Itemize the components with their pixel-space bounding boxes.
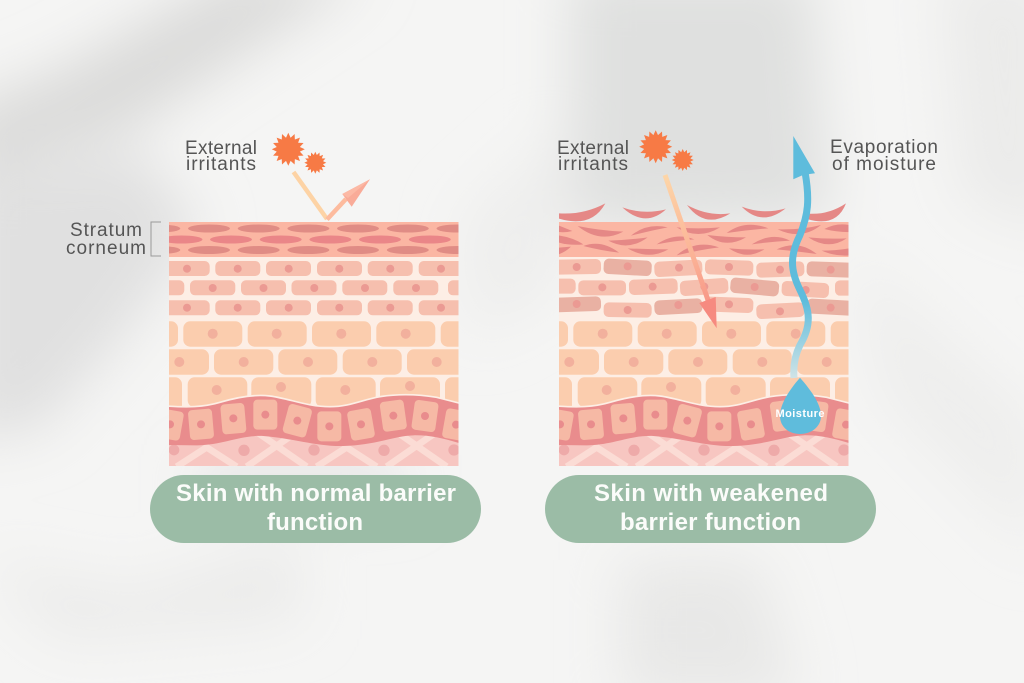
label: external irritants (right) bbox=[557, 138, 629, 175]
caption pill: weakened barrier: barrier function bbox=[620, 509, 801, 536]
stratum corneum layer bbox=[169, 222, 458, 257]
label: external irritants (right): External bbox=[557, 138, 629, 159]
panel: normal skin cross-section bbox=[169, 222, 458, 466]
detached surface flakes bbox=[559, 203, 846, 221]
bracket: stratum corneum extent bbox=[151, 222, 161, 256]
label: stratum corneum bbox=[66, 220, 146, 259]
disordered granular cell rows bbox=[538, 258, 868, 319]
arrow: irritants reflected by healthy barrier bbox=[294, 172, 370, 220]
label: external irritants (right): irritants bbox=[558, 154, 628, 175]
damaged stratum corneum layer bbox=[555, 222, 853, 257]
icon: moisture drop bbox=[776, 378, 824, 434]
label: external irritants (left) bbox=[185, 138, 257, 175]
deeper skin layers: spinous cells, basal layer, dermis bbox=[559, 257, 848, 466]
label: evaporation of moisture: of moisture bbox=[832, 154, 936, 175]
label: external irritants (left): irritants bbox=[186, 154, 256, 175]
label: external irritants (left): External bbox=[185, 138, 257, 159]
granular cell rows bbox=[169, 261, 458, 316]
arrow: irritants penetrating weakened barrier bbox=[665, 175, 717, 328]
caption pill: weakened barrier: Skin with weakened bbox=[594, 480, 828, 507]
caption pill: weakened barrier bbox=[545, 475, 876, 543]
caption pill: normal barrier: Skin with normal barrier bbox=[176, 480, 456, 507]
label: evaporation of moisture: Evaporation bbox=[830, 137, 938, 158]
caption pill: normal barrier bbox=[150, 475, 481, 543]
icon: irritant particles (left) bbox=[272, 133, 326, 174]
caption pill: normal barrier: function bbox=[267, 509, 363, 536]
arrow: moisture evaporating upward bbox=[792, 136, 815, 378]
label: stratum corneum: corneum bbox=[66, 238, 146, 259]
deeper skin layers: spinous cells, basal layer, dermis bbox=[169, 257, 458, 466]
label: evaporation of moisture bbox=[830, 137, 938, 175]
label: stratum corneum: Stratum bbox=[70, 220, 142, 241]
icon: irritant particles (right) bbox=[639, 130, 694, 171]
icon: moisture drop: Moisture bbox=[776, 408, 824, 420]
panel: weakened skin cross-section bbox=[559, 204, 848, 466]
